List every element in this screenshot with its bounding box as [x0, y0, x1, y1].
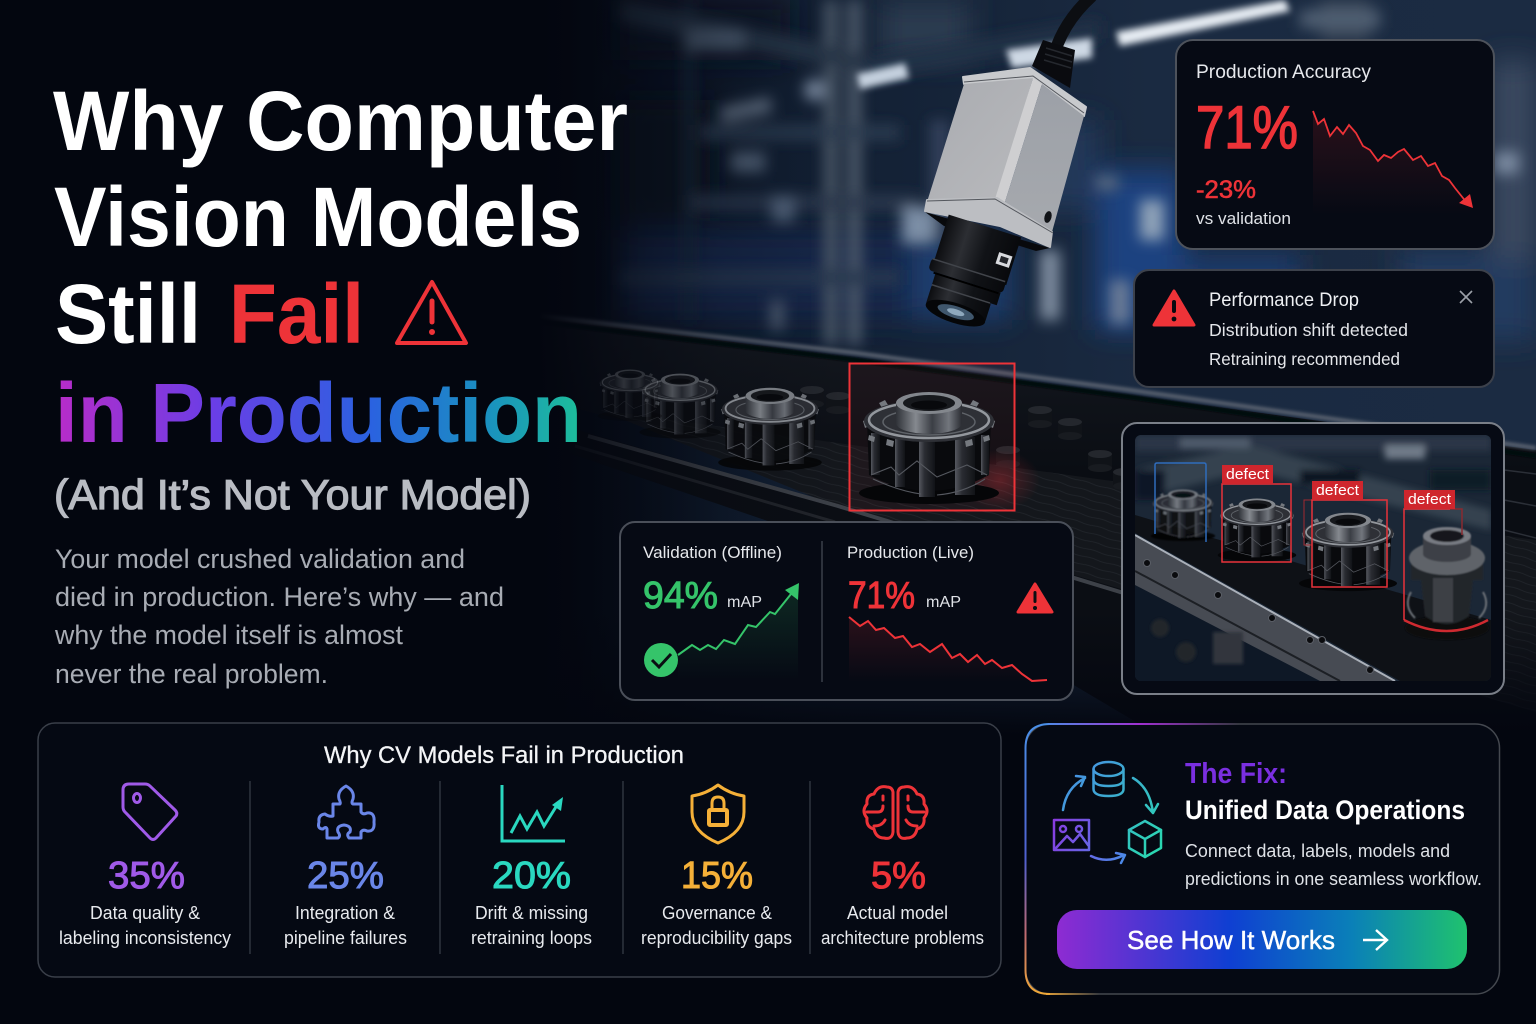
detected part with red box [849, 363, 1040, 510]
intro paragraph [54, 544, 504, 689]
panel: performance drop alert: Performance Drop [1209, 290, 1359, 311]
title [53, 74, 628, 460]
panel: the fix: The Fix: [1185, 758, 1287, 790]
panel: production accuracy: Production Accuracy [1196, 62, 1372, 83]
icon: puzzle piece [318, 786, 374, 838]
intro paragraph: why the model itself is almost [54, 620, 403, 650]
panel: validation vs production: Validation (Offline) [643, 544, 782, 562]
panel: the fix [1026, 724, 1500, 994]
stat: drift 20%: Drift & missing [475, 903, 588, 923]
detection image [1135, 435, 1491, 681]
defect labels [1222, 465, 1455, 509]
subtitle: (And It’s Not Your Model) [54, 471, 531, 518]
industrial camera [915, 0, 1092, 335]
panel: validation vs production: 71% [848, 575, 915, 617]
stat: drift 20%: 20% [492, 855, 571, 897]
stat: governance 15%: Governance & [662, 903, 772, 923]
stat: governance 15% [641, 785, 792, 948]
chart: production accuracy decline [1313, 111, 1473, 215]
chart: validation rising [678, 583, 799, 680]
detection boxes [1155, 463, 1462, 620]
stat: drift 20%: retraining loops [471, 928, 592, 948]
icon: warning [1018, 584, 1052, 612]
chart: production falling [849, 617, 1047, 682]
icon: alert triangle [1154, 291, 1194, 325]
intro paragraph: died in production. Here’s why — and [55, 582, 504, 612]
title: Vision Models [54, 170, 582, 264]
stat: data quality 35% [59, 784, 231, 948]
background knobs [800, 386, 1137, 490]
stat: integration 25%: Integration & [295, 903, 395, 923]
panel: performance drop alert: Retraining recommended [1209, 349, 1400, 369]
panel: validation vs production [620, 522, 1073, 700]
title: in Production [55, 366, 582, 460]
stat: integration 25%: pipeline failures [284, 928, 407, 948]
panel: performance drop alert [1134, 270, 1494, 387]
icon: shield lock [692, 785, 744, 843]
background machine parts on conveyor [598, 369, 822, 471]
button: see how it works: See How It Works [1127, 925, 1335, 955]
icon: rising chart [502, 785, 565, 841]
icon: title warning triangle [397, 282, 466, 343]
panel: the fix: predictions in one seamless workflow. [1185, 868, 1482, 889]
panel: performance drop alert: Distribution shift detected [1209, 320, 1408, 340]
title: Still [55, 267, 201, 361]
stat: integration 25% [284, 786, 407, 948]
panel: the fix: Unified Data Operations [1185, 795, 1465, 825]
panel: validation vs production: 94% [643, 575, 718, 617]
panel: validation vs production: Production (Live) [847, 544, 974, 562]
panel: production accuracy: vs validation [1196, 209, 1291, 228]
title: Fail [229, 267, 364, 361]
intro paragraph: never the real problem. [55, 659, 328, 689]
panel: the fix: Connect data, labels, models and [1185, 840, 1450, 861]
stat: drift 20% [471, 785, 592, 948]
stat: integration 25%: 25% [307, 855, 384, 897]
panel: production accuracy [1176, 40, 1494, 249]
stat: governance 15%: 15% [681, 855, 753, 897]
title: Why Computer [53, 74, 628, 168]
panel: production accuracy: -23% [1196, 176, 1256, 204]
stat: model architecture 5% [821, 787, 984, 948]
icon: check badge [644, 643, 678, 677]
defect labels: defect [1408, 492, 1451, 508]
stat: data quality 35%: Data quality & [90, 903, 200, 923]
stat: model architecture 5%: architecture problems [821, 928, 984, 948]
defect labels: defect [1316, 483, 1359, 499]
icon: close [1460, 291, 1472, 303]
stat: model architecture 5%: Actual model [847, 903, 948, 923]
icon: tag [123, 784, 177, 840]
stat: data quality 35%: labeling inconsistency [59, 928, 231, 948]
panel: validation vs production: mAP [926, 594, 961, 611]
stat: governance 15%: reproducibility gaps [641, 928, 792, 948]
panel: why CV models fail [38, 723, 1001, 977]
conveyor belt [540, 316, 1536, 760]
defect labels: defect [1226, 467, 1269, 483]
camera underside plate [925, 212, 1050, 251]
stat: model architecture 5%: 5% [871, 855, 926, 897]
icon: brain [864, 787, 927, 838]
button: see how it works [1057, 910, 1467, 969]
panel heading: Why CV Models Fail in Production [324, 742, 684, 769]
icon: data cycle [1054, 762, 1161, 863]
intro paragraph: Your model crushed validation and [55, 544, 465, 574]
panel: validation vs production: mAP [727, 594, 762, 611]
panel: production accuracy: 71% [1196, 94, 1298, 161]
stat: data quality 35%: 35% [108, 855, 185, 897]
panel: defect detection view [1122, 423, 1504, 694]
